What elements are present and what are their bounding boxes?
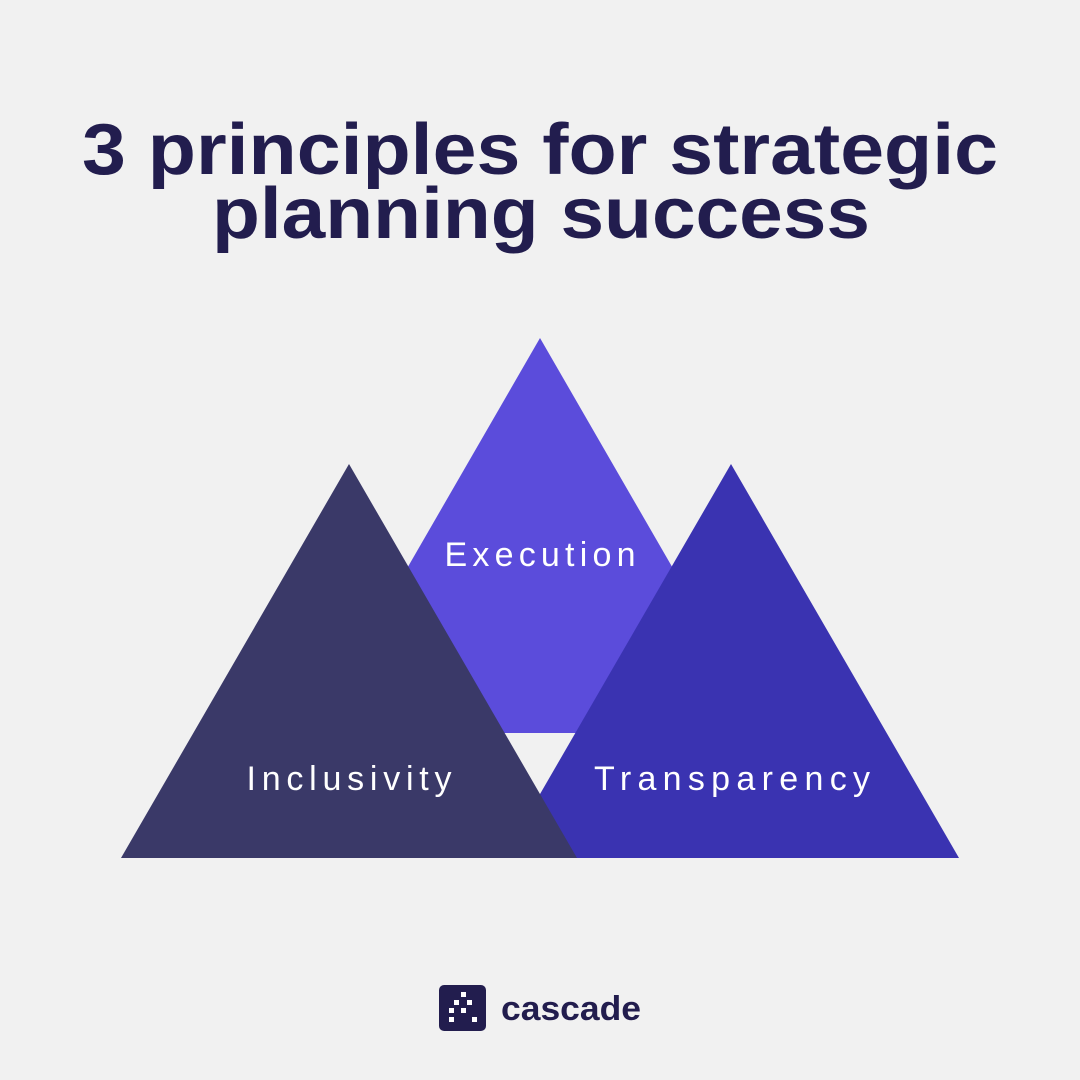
triangle: Execution <box>312 338 768 733</box>
title: planning success <box>212 174 870 254</box>
triangle: Transparency <box>503 464 959 858</box>
logo: cascade <box>439 985 641 1031</box>
title <box>82 110 998 254</box>
triangle: Inclusivity: Inclusivity <box>246 760 452 798</box>
triangle: Inclusivity <box>121 464 577 858</box>
title: 3 principles for strategic <box>82 110 998 190</box>
triangle: Execution: Execution <box>444 536 636 574</box>
logo: cascade: cascade <box>501 990 641 1028</box>
triangle: Transparency: Transparency <box>594 760 870 798</box>
